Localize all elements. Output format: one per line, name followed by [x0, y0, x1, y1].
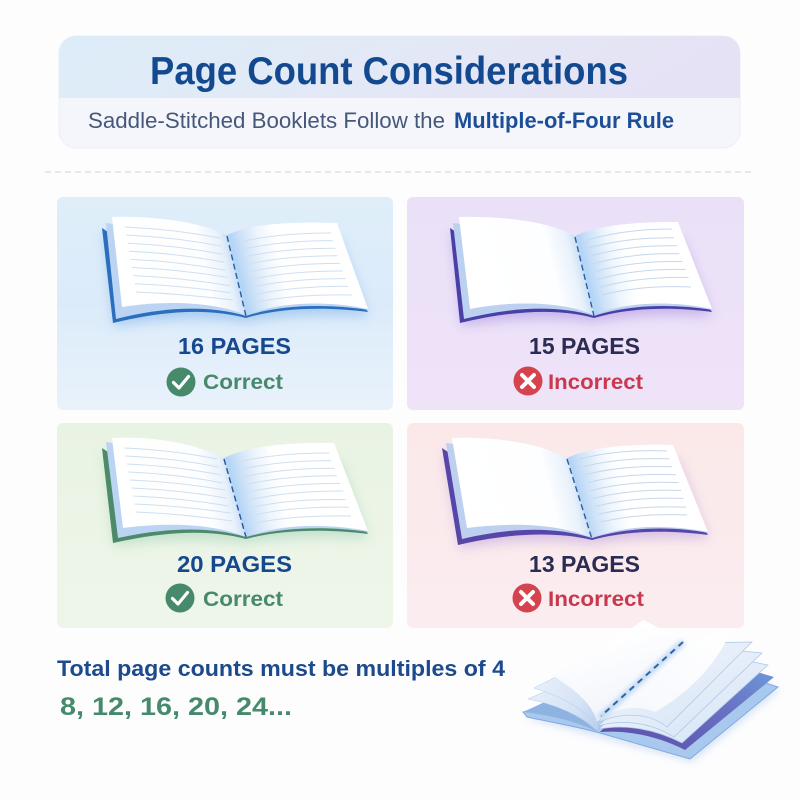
illustration: fanned booklet [523, 620, 780, 762]
icon: check [166, 584, 194, 612]
status: incorrect: Incorrect [548, 371, 643, 394]
right white page [597, 629, 732, 722]
label: 20 pages: 20 PAGES [177, 551, 292, 577]
subtitle emphasis: Multiple-of-Four Rule [454, 108, 674, 133]
icon: check [166, 368, 196, 396]
subtitle: Saddle-Stitched Booklets Follow the [88, 108, 445, 133]
label: 13 pages: 13 PAGES [529, 551, 640, 577]
panel: 16 pages correct [57, 197, 393, 410]
rule text: Total page counts must be multiples of 4 [57, 656, 506, 681]
big left page [552, 620, 683, 722]
status: correct: Correct [203, 371, 283, 394]
status: correct: Correct [203, 588, 283, 611]
label: 16 pages: 16 PAGES [178, 333, 291, 359]
status: incorrect: Incorrect [548, 588, 644, 611]
header panel [59, 36, 740, 148]
panel: 20 pages correct [57, 423, 393, 628]
icon: cross [512, 584, 542, 612]
left page stack [523, 680, 620, 731]
illustration: open booklet with lined pages, green cover [102, 438, 368, 546]
label: 15 pages: 15 PAGES [529, 333, 640, 359]
multiples list: 8, 12, 16, 20, 24... [60, 693, 292, 721]
panel: 15 pages incorrect [407, 197, 744, 410]
panel: 13 pages incorrect [407, 423, 744, 628]
illustration: open booklet with lined pages [102, 217, 368, 326]
spine stitches [601, 642, 683, 716]
icon: cross [514, 366, 542, 396]
spine glow [600, 642, 683, 718]
illustration: open booklet with blank left page [450, 217, 712, 326]
right page stack [600, 650, 774, 750]
illustration: open booklet with blank left page [442, 438, 708, 548]
back cover [523, 655, 778, 759]
title: Page Count Considerations [150, 50, 628, 93]
